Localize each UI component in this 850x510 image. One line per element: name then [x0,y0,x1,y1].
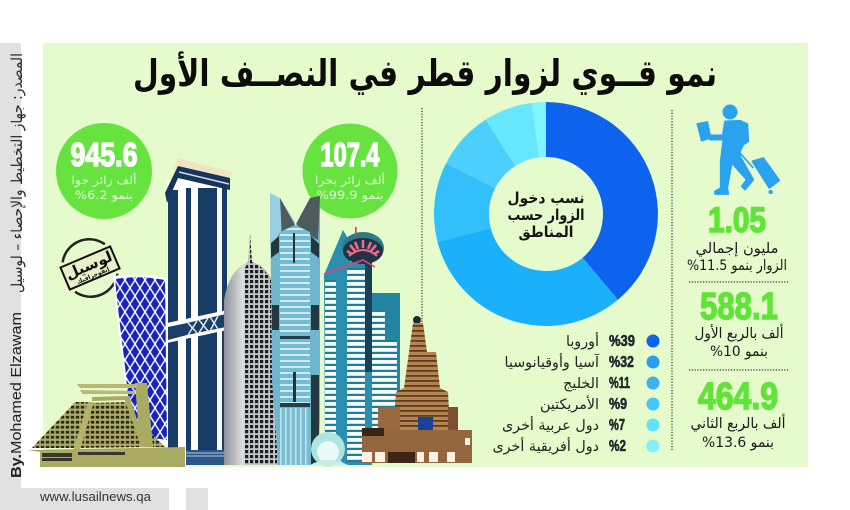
legend row: Gulf [563,375,660,392]
bottom grey small block [186,488,208,510]
callout: air visitors [56,123,152,219]
stat: first quarter [694,286,784,360]
callout: air visitors: بنمو ⁦%6.2⁩ [75,188,133,203]
divider dotted [422,108,788,452]
legend row: Asia and Oceania: آسيا وأوقيانوسيا [505,353,600,371]
stamp: Lusail infographic: إنفوجرافيك [76,266,111,286]
callout: sea visitors [302,124,398,218]
stat: first quarter: ألف بالربع الأول [694,323,784,342]
callout: air visitors: 945.6 [70,136,138,173]
stat: total visitors: الزوار بنمو ⁦%11.5⁩ [687,258,787,274]
skyline illustration [27,158,472,467]
callout: sea visitors: ألف زائر بحرا [315,172,385,188]
legend [492,332,660,455]
donut center label: نسب دخول [508,189,584,207]
legend row: Americas: الأمريكتين [540,395,599,413]
donut center label: المناطق [518,223,574,241]
legend row: Americas [540,395,660,413]
author credit: By.Mohamed Elzawam [8,312,25,478]
donut chart: visitors by region [434,102,658,326]
legend row: other Arab countries: %7 [609,417,625,434]
stat: second quarter: ألف بالربع الثاني [690,413,786,432]
legend row: Asia and Oceania: %32 [609,354,634,371]
legend row: other Arab countries: دول عربية أخرى [502,416,599,434]
stat: total visitors [687,201,787,274]
bottom grey website strip [21,488,169,510]
legend row: other African countries: دول أفريقية أخرى [492,437,599,455]
stamp: Lusail infographic: لوسيل [63,247,115,283]
building: teal twin-peak tower [270,193,320,465]
stamp: Lusail infographic [54,231,126,305]
website: www.lusailnews.qa [39,490,151,504]
building: olive stepped hotel [27,383,185,467]
callout: sea visitors: 107.4 [320,136,380,173]
donut center label [508,189,584,241]
callout: sea visitors: بنمو ⁦%99.9⁩ [316,188,383,203]
legend row: Gulf: %11 [609,375,630,392]
main green panel [43,43,808,467]
title: نمو قــوي لزوار قطر في النصــف الأول [133,50,717,95]
legend row: Europe: %39 [609,333,635,350]
building: sail tower with disc [324,227,400,465]
legend row: other African countries [492,437,660,455]
legend row: Americas: %9 [609,396,627,413]
building: bullet tower [224,233,278,465]
stat: total visitors: 1.05 [708,201,766,240]
legend row: Gulf: الخليج [563,376,599,392]
left grey source strip [0,43,21,510]
icon: traveller with suitcase [697,105,779,194]
stat: second quarter: بنمو ⁦%13.6⁩ [702,435,774,451]
building: spiral minaret [378,316,458,437]
legend row: other Arab countries [502,416,660,434]
legend row: Europe [566,332,660,350]
stat: total visitors: مليون إجمالي [696,241,778,257]
building: glass dome [310,432,348,466]
legend row: Asia and Oceania [505,353,660,371]
building: tornado tower [113,274,168,445]
stat: second quarter: 464.9 [698,376,778,418]
stat: second quarter [690,376,786,451]
stat: first quarter: 588.1 [700,286,778,328]
donut center label: الزوار حسب [508,206,584,224]
legend row: Europe: أوروبا [566,332,599,350]
stat: first quarter: بنمو ⁦%10⁩ [710,344,768,360]
building: dark navy tower [165,158,232,465]
building: old souq houses [362,428,472,463]
source credit: المصدر: جهاز التخطيط والإحصاء – لوسيل [8,53,26,293]
legend row: other African countries: %2 [609,438,626,455]
callout: air visitors: ألف زائر جوا [72,172,136,188]
